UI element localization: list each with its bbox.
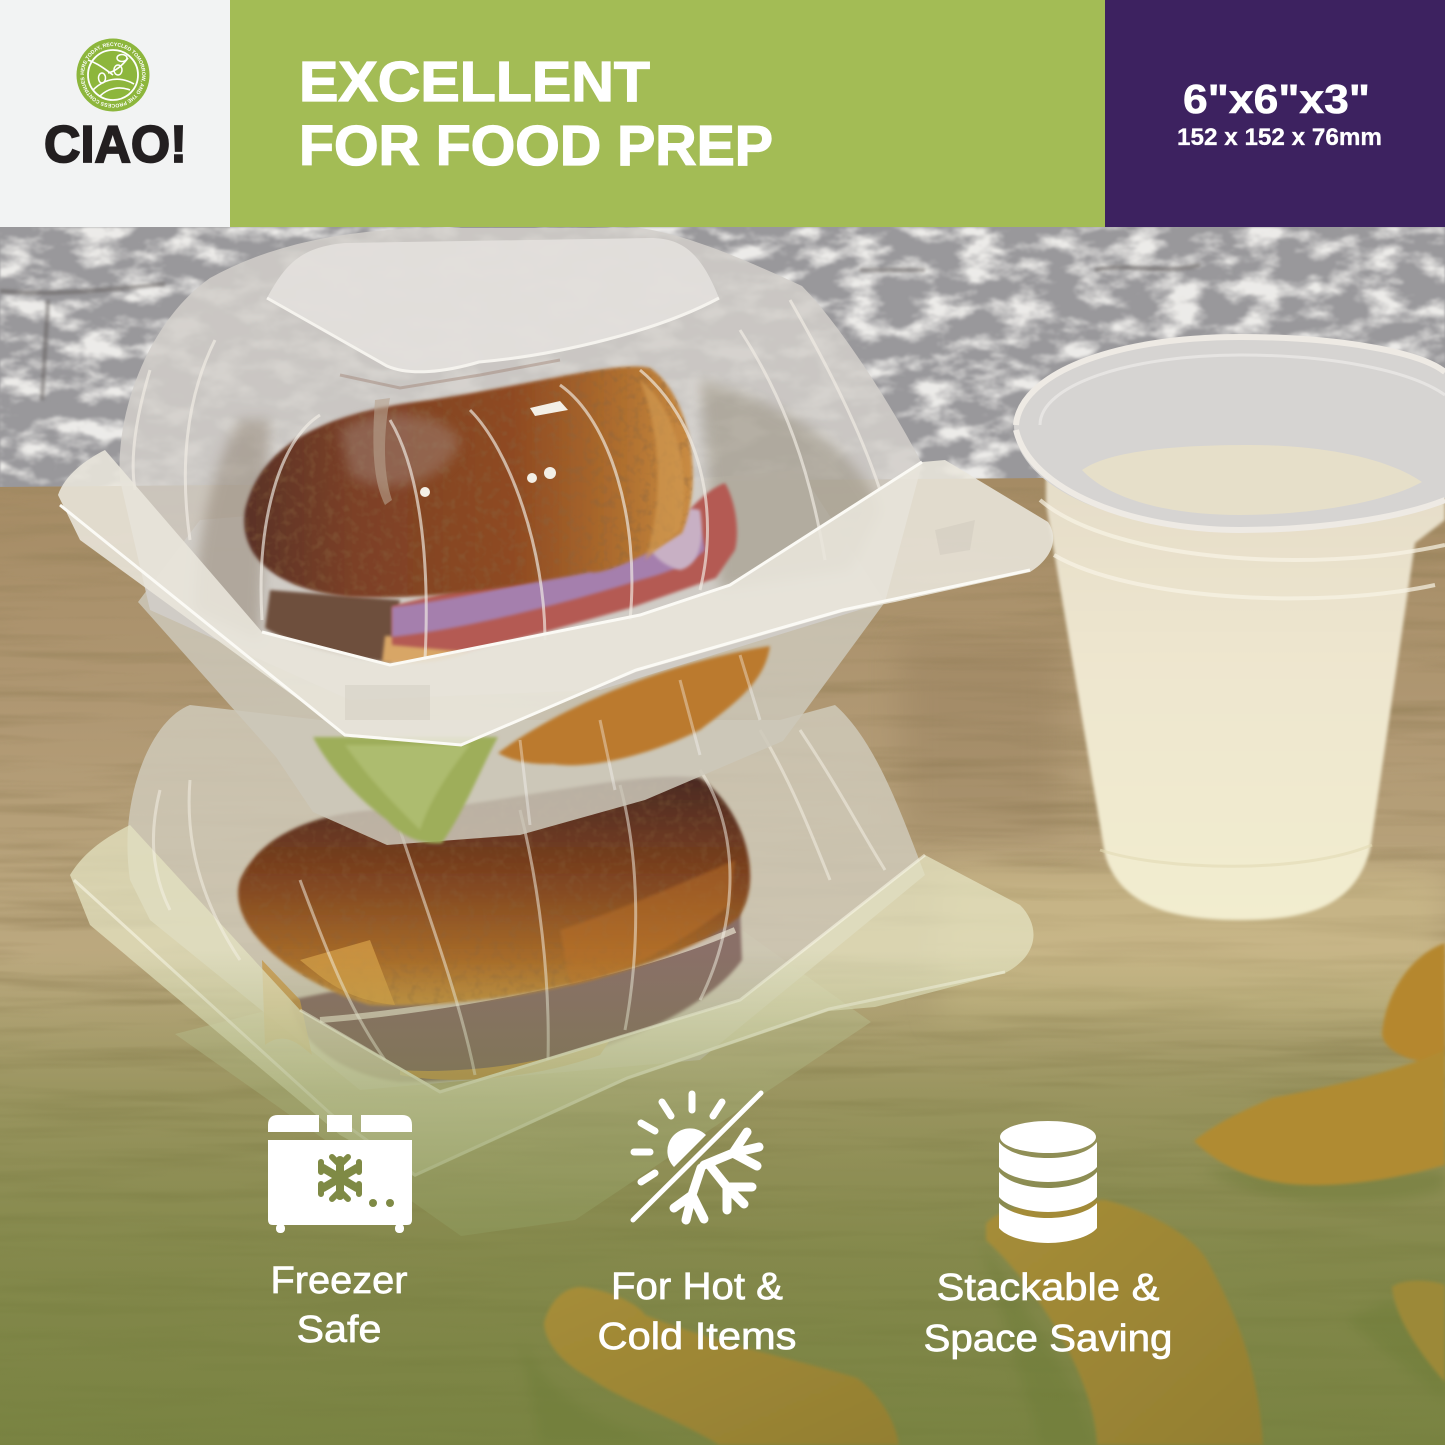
orange bun and lettuce — [313, 646, 770, 843]
upper container — [58, 228, 1053, 845]
brand name: CIAO! — [44, 116, 187, 174]
title: FOR FOOD PREP — [299, 114, 773, 178]
feature: hot and cold — [598, 1093, 796, 1358]
dome — [120, 228, 922, 700]
dimensions — [1177, 76, 1382, 151]
label — [598, 1266, 796, 1358]
feature: freezer safe — [268, 1115, 412, 1351]
icon: recycled olive badge: HERE TODAY, RECYCLED TOMORROW, AND THE PROCESS CONTINUES — [80, 42, 146, 108]
ridges — [133, 300, 880, 660]
dimensions: 6"x6"x3" — [1183, 76, 1370, 122]
potato wedges — [544, 943, 1445, 1445]
title: EXCELLENT — [299, 50, 650, 114]
label — [924, 1267, 1172, 1360]
icon: freezer — [268, 1115, 412, 1233]
label: Space Saving — [924, 1318, 1172, 1360]
feature: stackable — [924, 1121, 1172, 1360]
header: size panel — [1105, 0, 1445, 227]
upper tub — [138, 470, 885, 845]
ridges — [153, 730, 885, 1075]
label: Freezer — [270, 1260, 408, 1302]
header: logo panel — [0, 0, 230, 227]
label: Safe — [296, 1309, 382, 1351]
lower bun and filling — [238, 777, 750, 1082]
cup of lemonade — [1014, 335, 1445, 920]
brick wall — [0, 227, 1445, 492]
wood table — [0, 478, 1445, 1445]
label: Cold Items — [598, 1316, 796, 1358]
title — [299, 50, 773, 178]
dimensions: 152 x 152 x 76mm — [1177, 124, 1382, 151]
icon: stacked discs — [999, 1121, 1097, 1243]
shadows under food — [520, 1165, 1445, 1445]
label: Stackable & — [936, 1267, 1160, 1309]
label — [270, 1260, 408, 1351]
label: For Hot & — [611, 1266, 783, 1308]
tub — [175, 900, 871, 1236]
lower flange — [70, 825, 1034, 1177]
icon: sun and snowflake — [633, 1093, 761, 1220]
upper flange — [58, 450, 1053, 745]
header: title panel — [230, 0, 1105, 227]
lid top — [267, 238, 719, 371]
upper bun — [244, 366, 737, 663]
green gradient overlay — [0, 950, 1445, 1445]
lower container — [70, 705, 1034, 1236]
